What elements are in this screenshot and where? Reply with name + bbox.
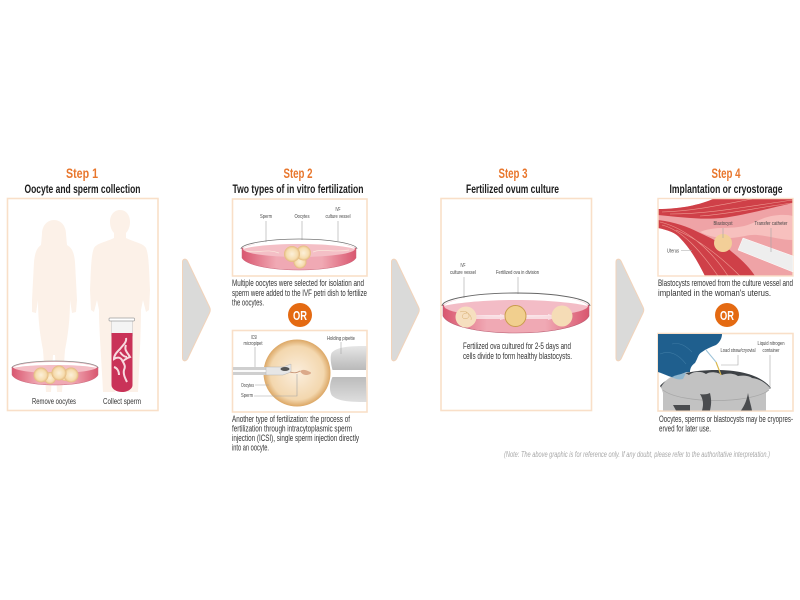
arrow 3: [616, 259, 644, 361]
text: method two: injection (ICSI), single sperm injection directly: [232, 433, 359, 444]
text: method one: [232, 278, 367, 308]
labels: vessel and fertilized ova: IVF: [460, 263, 466, 269]
labels: load straw, nitrogen container: [720, 341, 784, 389]
badge: OR: [715, 303, 739, 327]
step 3 heading: Fertilized ovum culture: [466, 184, 559, 196]
step 2 label: Step 2: [284, 166, 312, 181]
labels: blastocyst, catheter, uterus: Transfer catheter: [754, 221, 788, 227]
labels: blastocyst, catheter, uterus: Blastocyst: [714, 221, 733, 227]
step 2 column: [232, 166, 367, 454]
arrow 1: [182, 259, 210, 361]
text: method one: the oocytes.: [232, 298, 264, 308]
step 1 label: Step 1: [66, 166, 98, 181]
panel: implantation: [658, 198, 793, 276]
text: cryostorage: erved for later use.: [659, 424, 711, 434]
labels: load straw, nitrogen container: container: [762, 348, 780, 354]
text: culture description: Fertilized ova cultured for 2-5 days and: [463, 341, 571, 352]
text: method two: fertilization through intracytoplasmic sperm: [232, 424, 352, 434]
text: method two: into an oocyte.: [232, 442, 269, 454]
labels: blastocyst, catheter, uterus: Uterus: [667, 248, 679, 254]
panel: collection: [8, 198, 158, 410]
text: cryostorage: [659, 414, 793, 434]
labels: load straw, nitrogen container: Liquid nitrogen: [758, 341, 784, 347]
labels: sperm, oocytes, vessel: IVF: [336, 207, 341, 213]
badge: OR: OR: [720, 308, 734, 323]
icon: sperm test tube: [109, 318, 134, 392]
step 2 heading: Two types of in vitro fertilization: [232, 184, 364, 196]
step 3 column: [441, 166, 592, 410]
labels: vessel and fertilized ova: Fertilized ova in division: [496, 270, 539, 276]
badge: OR: OR: [293, 308, 307, 323]
labels: vessel and fertilized ova: [450, 263, 539, 303]
text: culture description: [463, 341, 572, 362]
labels: micropipette, holding pipette, oocytes, sperm: Sperm: [241, 393, 253, 399]
step 3 label: Step 3: [498, 166, 528, 181]
labels: micropipette, holding pipette, oocytes, sperm: Oocytes: [241, 383, 254, 389]
panel: petri dish fertilization: [232, 199, 367, 276]
text: method two: [232, 414, 359, 454]
badge: OR: [288, 303, 312, 327]
labels: sperm, oocytes, vessel: culture vessel: [326, 214, 350, 220]
text: method one: sperm were added to the IVF petri dish to fertilize: [232, 288, 367, 299]
step 4 column: [658, 166, 793, 434]
text: implantation: implanted in the woman's uterus.: [658, 288, 771, 299]
icon: egg with micropipette: [233, 340, 330, 406]
labels: micropipette, holding pipette, oocytes, sperm: ICSI: [251, 335, 257, 341]
icon: holding pipette: [330, 346, 366, 402]
icon: petri dish with oocytes: [12, 361, 98, 385]
text: method one: Multiple oocytes were selected for isolation and: [232, 278, 364, 289]
icon: culture dish with dividing ova: [442, 293, 590, 333]
icon: petri dish: [241, 239, 357, 270]
arrow 2: [392, 259, 419, 361]
labels: sperm, oocytes, vessel: [260, 207, 350, 243]
panel: culture: [441, 198, 592, 410]
text: method two: Another type of fertilization: the process of: [232, 414, 350, 425]
icon: liquid nitrogen container: [658, 334, 771, 410]
labels: micropipette, holding pipette, oocytes, sperm: micropipet: [244, 341, 263, 347]
text: culture description: cells divide to form healthy blastocysts.: [463, 351, 572, 362]
panel: ICSI: [232, 330, 367, 412]
step 1 heading: Oocyte and sperm collection: [24, 184, 140, 196]
caption: collect sperm: Collect sperm: [103, 397, 141, 406]
labels: vessel and fertilized ova: culture vessel: [450, 270, 476, 276]
labels: load straw, nitrogen container: Load straw/cryovial: [720, 348, 756, 354]
icon: transfer catheter: [738, 238, 793, 272]
icon: blastocyst: [714, 234, 732, 252]
labels: micropipette, holding pipette, oocytes, sperm: [241, 335, 355, 399]
icon: man silhouette: [90, 210, 150, 392]
panel: cryostorage: [658, 334, 793, 411]
caption: remove oocytes: Remove oocytes: [32, 397, 76, 406]
labels: sperm, oocytes, vessel: Oocytes: [294, 214, 310, 220]
icon: woman silhouette: [32, 220, 77, 392]
labels: sperm, oocytes, vessel: Sperm: [260, 214, 272, 220]
step 4 label: Step 4: [712, 166, 741, 181]
text: implantation: [658, 278, 793, 299]
labels: blastocyst, catheter, uterus: [667, 221, 788, 254]
step 1 column: [8, 166, 158, 410]
labels: micropipette, holding pipette, oocytes, sperm: Holding pipette: [327, 336, 355, 342]
